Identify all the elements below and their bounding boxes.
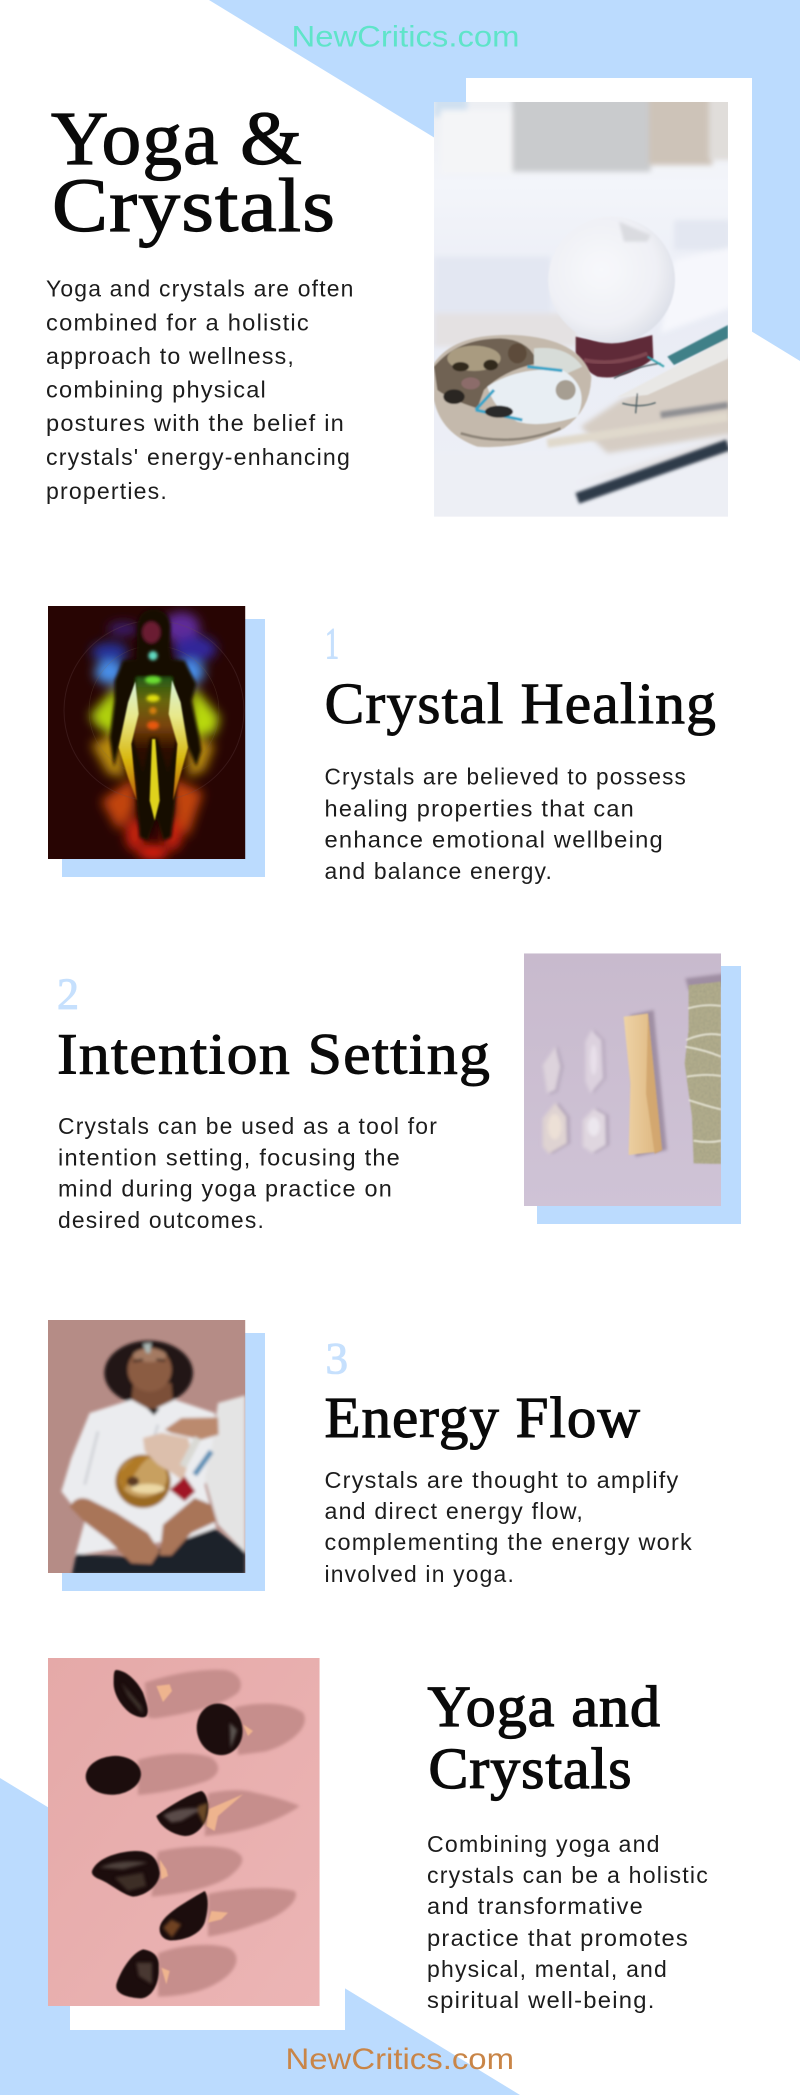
text: spiritual well-being. bbox=[427, 1987, 656, 2013]
sleeve bbox=[205, 1395, 245, 1553]
pants bbox=[72, 1529, 245, 1575]
blue offset panel bbox=[62, 619, 265, 877]
text: intention setting, focusing the bbox=[58, 1144, 401, 1170]
text bbox=[324, 764, 687, 884]
section 3 bbox=[48, 1320, 693, 1591]
palo santo bbox=[624, 1013, 662, 1155]
background shape: top right triangle bbox=[209, 0, 800, 361]
text: Combining yoga and bbox=[427, 1831, 661, 1857]
hair bbox=[104, 1341, 193, 1405]
blue offset panel bbox=[62, 1333, 265, 1591]
title line 2: Crystals bbox=[52, 164, 336, 248]
text: enhance emotional wellbeing bbox=[324, 827, 664, 853]
gloved hand bbox=[143, 1433, 191, 1481]
quartz points bbox=[543, 1047, 560, 1093]
sphere bbox=[550, 242, 675, 344]
text: and direct energy flow, bbox=[324, 1498, 584, 1524]
watermark top: NewCritics.com bbox=[292, 20, 520, 54]
chakras bbox=[145, 651, 161, 730]
main title bbox=[51, 97, 336, 248]
title line 1: Yoga & bbox=[51, 97, 303, 181]
photo: dark tumbled stones on pink bbox=[48, 1658, 320, 2006]
photo: crystal sphere and abalone shell bbox=[434, 97, 736, 523]
number: 3 bbox=[326, 1334, 348, 1383]
number: 1 bbox=[325, 619, 339, 668]
intro paragraph: combining physical bbox=[46, 376, 267, 402]
text: healing properties that can bbox=[324, 795, 635, 821]
upper hand bbox=[165, 1417, 219, 1440]
number: 2 bbox=[57, 969, 79, 1018]
bowl bbox=[115, 1455, 171, 1508]
heading: Intention Setting bbox=[57, 1022, 491, 1086]
blue offset panel bbox=[537, 966, 741, 1224]
heading bbox=[428, 1674, 661, 1801]
section 1 bbox=[48, 606, 717, 884]
highlights bbox=[100, 1683, 237, 1984]
text: Crystals are thought to amplify bbox=[324, 1467, 680, 1493]
intro paragraph: postures with the belief in bbox=[46, 410, 345, 436]
white frame behind final photo bbox=[70, 1900, 345, 2030]
refractions bbox=[156, 1684, 253, 1984]
feather bbox=[614, 325, 728, 413]
intro paragraph: approach to wellness, bbox=[46, 343, 295, 369]
photo: aura chakra body bbox=[48, 606, 245, 860]
sage bundle bbox=[685, 982, 721, 1164]
text: complementing the energy work bbox=[324, 1529, 693, 1555]
sticks bbox=[547, 405, 728, 498]
heading: Crystal Healing bbox=[324, 671, 717, 736]
watermark bottom: NewCritics.com bbox=[286, 2043, 514, 2076]
text: crystals can be a holistic bbox=[427, 1862, 709, 1888]
text: and balance energy. bbox=[324, 858, 553, 884]
text: mind during yoga practice on bbox=[58, 1176, 393, 1202]
heading: Energy Flow bbox=[324, 1385, 641, 1450]
bracelets bbox=[183, 1438, 198, 1466]
text: Crystals can be used as a tool for bbox=[58, 1113, 438, 1139]
intro paragraph: Yoga and crystals are often bbox=[46, 276, 355, 302]
lower hands bbox=[70, 1498, 160, 1564]
heading: Crystals bbox=[428, 1736, 632, 1801]
section 4 bbox=[48, 1658, 709, 2013]
light strips bbox=[119, 680, 188, 821]
text: practice that promotes bbox=[427, 1925, 689, 1951]
intro paragraph bbox=[46, 276, 355, 504]
text: involved in yoga. bbox=[324, 1561, 515, 1587]
text: Crystals are believed to possess bbox=[324, 764, 687, 790]
text: desired outcomes. bbox=[58, 1207, 265, 1233]
text bbox=[58, 1113, 438, 1233]
text bbox=[324, 1467, 693, 1587]
white frame behind hero photo bbox=[466, 78, 752, 334]
silhouette bbox=[110, 609, 201, 841]
intro paragraph: crystals' energy-enhancing bbox=[46, 444, 351, 470]
shell bbox=[434, 335, 591, 447]
shirt bbox=[61, 1400, 221, 1555]
face bbox=[128, 1348, 172, 1392]
text: physical, mental, and bbox=[427, 1956, 668, 1982]
heading: Yoga and bbox=[428, 1674, 661, 1739]
text bbox=[427, 1831, 709, 2013]
photo: crystals, palo santo and sage bbox=[524, 953, 725, 1206]
stand bbox=[576, 335, 653, 378]
neck bbox=[131, 1383, 173, 1411]
shadows bbox=[138, 1670, 305, 1997]
photo: woman with singing bowl bbox=[48, 1320, 245, 1575]
background shape: bottom left triangle bbox=[0, 1778, 520, 2095]
red cuff bbox=[170, 1476, 195, 1501]
intro paragraph: combined for a holistic bbox=[46, 309, 310, 335]
text: and transformative bbox=[427, 1893, 644, 1919]
stones bbox=[84, 1670, 248, 1998]
intro paragraph: properties. bbox=[46, 478, 168, 504]
section 2 bbox=[57, 953, 741, 1233]
